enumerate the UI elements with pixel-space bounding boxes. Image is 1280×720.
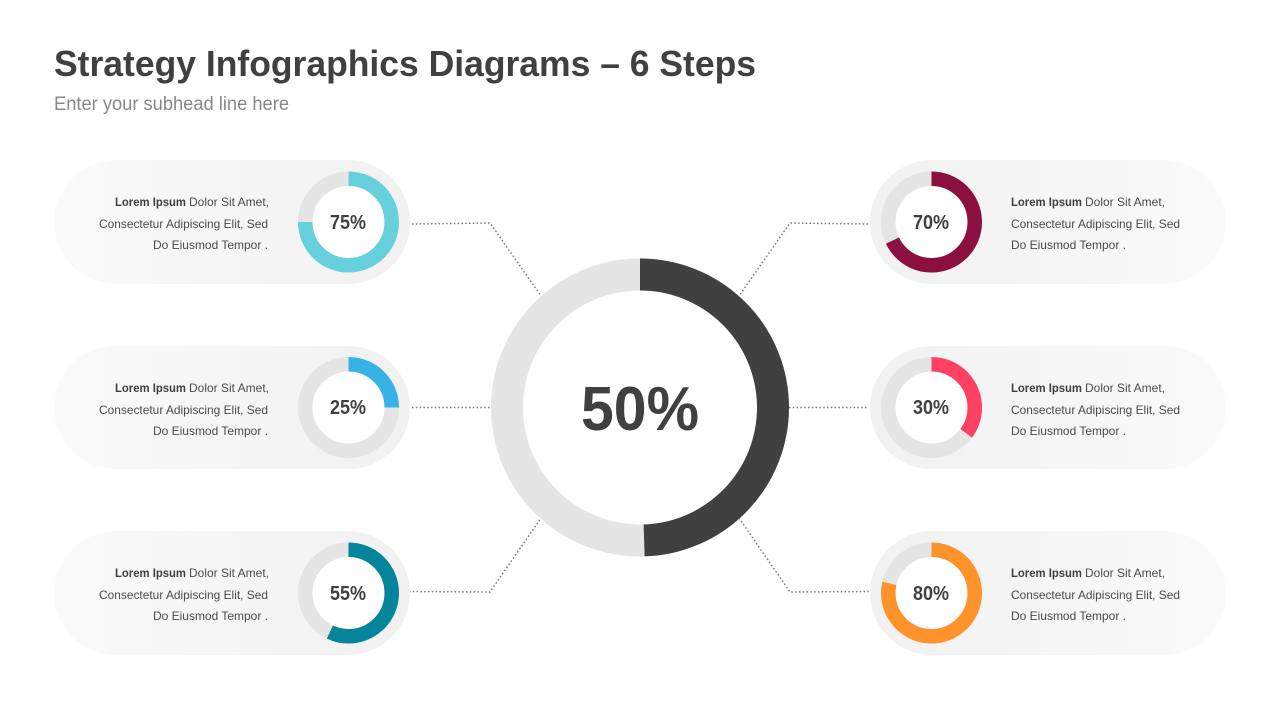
text block: Consectetur Adipiscing Elit, Sed: [1011, 217, 1180, 231]
donut 55%: [305, 550, 392, 636]
connector: top right: [739, 223, 868, 296]
text block: Consectetur Adipiscing Elit, Sed: [1011, 403, 1180, 417]
text block: Lorem Ipsum: [1011, 566, 1082, 580]
donut 30%: 30%: [913, 397, 949, 419]
text block: Do Eiusmod Tempor .: [1011, 609, 1126, 623]
donut 25%: [305, 364, 392, 451]
panel: step 70%: [870, 160, 1226, 284]
text block: Consectetur Adipiscing Elit, Sed: [1011, 588, 1180, 602]
text block: Dolor Sit Amet,: [1085, 381, 1165, 395]
text block: Lorem Ipsum: [1011, 381, 1082, 395]
donut 25%: 25%: [330, 397, 366, 419]
text block: [1011, 566, 1180, 623]
text block: Consectetur Adipiscing Elit, Sed: [99, 588, 268, 602]
text block: [1011, 381, 1180, 438]
text block: Consectetur Adipiscing Elit, Sed: [99, 403, 268, 417]
donut 70%: [888, 179, 975, 265]
central donut 50%: [507, 274, 773, 540]
pill background: [870, 531, 1226, 655]
text block: Dolor Sit Amet,: [189, 566, 269, 580]
text block: [99, 195, 269, 252]
pill background: [870, 160, 1226, 284]
text block: Dolor Sit Amet,: [189, 381, 269, 395]
panel: step 55%: [54, 531, 410, 655]
connector: bottom right: [739, 518, 871, 592]
text block: Do Eiusmod Tempor .: [153, 424, 268, 438]
donut 70%: 70%: [913, 212, 949, 234]
text block: Dolor Sit Amet,: [189, 195, 269, 209]
pill background: [54, 346, 410, 469]
central donut 50%: 50%: [581, 375, 699, 444]
text block: [99, 381, 269, 438]
connector: middle right: [789, 406, 868, 408]
panel: step 80%: [870, 531, 1226, 655]
panel: step 30%: [870, 346, 1226, 469]
text block: Lorem Ipsum: [115, 381, 186, 395]
donut 75%: 75%: [330, 212, 366, 234]
title: Strategy Infographics Diagrams – 6 Steps: [54, 43, 756, 84]
text block: [1011, 195, 1180, 252]
text block: Do Eiusmod Tempor .: [153, 609, 268, 623]
donut 80%: [888, 550, 975, 636]
text block: [99, 566, 269, 623]
text block: Lorem Ipsum: [1011, 195, 1082, 209]
pill background: [870, 346, 1226, 469]
connector: middle left: [412, 406, 491, 408]
text block: Consectetur Adipiscing Elit, Sed: [99, 217, 268, 231]
text block: Do Eiusmod Tempor .: [1011, 238, 1126, 252]
pill background: [54, 531, 410, 655]
connector: top left: [412, 223, 541, 296]
subhead: Enter your subhead line here: [54, 94, 289, 115]
panel: step 25%: [54, 346, 410, 469]
text block: Dolor Sit Amet,: [1085, 195, 1165, 209]
donut 75%: [305, 179, 392, 265]
pill background: [54, 160, 410, 284]
donut 55%: 55%: [330, 583, 366, 605]
panel: step 75%: [54, 160, 410, 284]
connector: bottom left: [409, 518, 541, 592]
donut 80%: 80%: [913, 583, 949, 605]
text block: Lorem Ipsum: [115, 195, 186, 209]
donut 30%: [888, 364, 975, 451]
text block: Lorem Ipsum: [115, 566, 186, 580]
text block: Do Eiusmod Tempor .: [153, 238, 268, 252]
text block: Dolor Sit Amet,: [1085, 566, 1165, 580]
text block: Do Eiusmod Tempor .: [1011, 424, 1126, 438]
